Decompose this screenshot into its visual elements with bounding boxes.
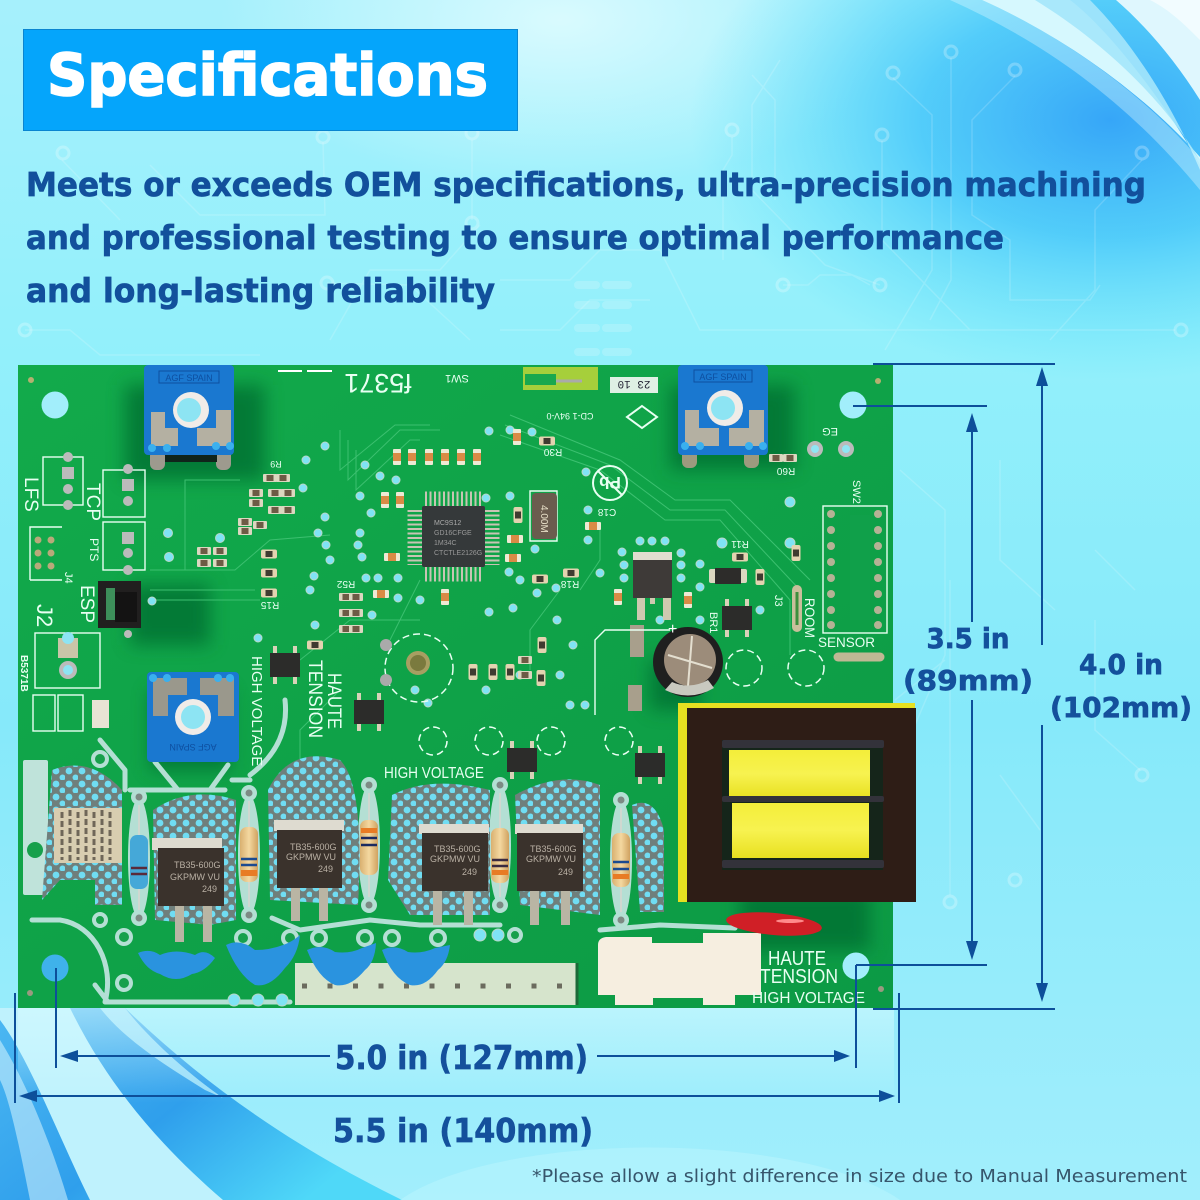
silkscreen labels: TENSION [304,660,325,738]
date label [610,377,658,393]
triac Q5: 249 [202,884,217,894]
silkscreen labels: B5371B [18,655,29,692]
microcontroller U1 [415,499,492,574]
small ICs [270,646,665,784]
silkscreen labels: R60 [776,465,795,476]
microcontroller U1: CTCTLE2126G [434,550,482,557]
SMD parts [197,429,800,686]
dimension: 5.5 in [15,993,899,1150]
blue trim potentiometer bottom: AGF SPAIN [169,742,217,752]
triac Q4: 249 [318,864,333,874]
silkscreen labels [18,368,875,1007]
white relay [598,933,761,1005]
triac Q6: TB35-600G [530,844,577,854]
silkscreen labels: J4 [62,572,74,584]
center post P3 [380,639,430,686]
dimension: 5.0 in: 5.0 in (127mm) [335,1038,588,1077]
silkscreen labels: R9 [270,459,282,469]
silkscreen labels: PTS [87,538,101,561]
green LED [523,367,598,390]
triac Q4: GKPMW VU [286,852,336,862]
pad rings [93,752,521,990]
silkscreen labels: BR1 [707,612,719,633]
dimension: 4.0 in: 4.0 in [1079,648,1163,681]
black connector ESP [98,581,141,638]
description text: and professional testing to ensure optimal performance [26,218,1004,257]
red capacitor [725,909,823,939]
blue trim potentiometer bottom [147,672,239,762]
jumpers J3 [797,590,880,657]
triac Q6: GKPMW VU [526,854,576,864]
blue ceramic capacitors [138,935,450,985]
triac Q3: GKPMW VU [430,854,480,864]
diode and bridge rectifier [709,568,752,637]
triac Q6 [515,824,583,925]
triac group [152,820,583,942]
dimension: 3.5 in: (89mm) [903,664,1033,697]
description text [26,165,1146,310]
copper pads with vias [42,756,664,925]
silkscreen labels: LFS [20,477,41,512]
date label: 23 10 [617,377,651,389]
triac Q5: TB35-600G [174,860,221,870]
silkscreen labels: TENSION [760,966,838,988]
silkscreen labels: ROOM [802,598,818,638]
dimension: 4.0 in: (102mm) [1050,691,1192,724]
silkscreen labels: SW2 [850,480,862,504]
mounting holes [27,377,884,996]
voltage regulator Q1 [633,552,672,620]
silkscreen labels: SENSOR [818,634,875,650]
lead-free mark: Pb [599,473,621,492]
crystal Y1 [530,491,557,541]
silkscreen labels: R30 [543,446,562,457]
title banner [24,30,518,130]
triac Q3: TB35-600G [434,844,481,854]
silkscreen labels: HIGH VOLTAGE [752,990,865,1007]
silkscreen labels: SW1 [445,372,469,384]
triac Q3 [419,824,489,925]
silkscreen labels: J3 [772,595,784,607]
silkscreen labels: ESP [76,585,97,623]
left terminals LFS TCP PTS J4 J2 [30,452,145,688]
silkscreen labels: EG [822,425,838,437]
blue trim potentiometer top-right [678,365,768,468]
UL mark: CD-1 94V-0 [546,411,594,421]
electrolytic capacitor [595,621,723,715]
microcontroller U1: 1M34C [434,540,457,547]
silkscreen labels: HIGH VOLTAGE [248,656,265,766]
dimension: 3.5 in: 3.5 in [926,622,1010,655]
adjust ring and diode outlines [385,634,824,755]
transformer [678,703,916,902]
silkscreen labels: R11 [731,538,749,549]
microcontroller U1: GD16CFGE [434,530,472,537]
lead-free mark [593,466,627,500]
wide mint traces [23,700,735,1002]
dimension: 3.5 in [853,406,1033,965]
silkscreen labels: HIGH VOLTAGE [384,765,484,782]
silkscreen labels: HAUTE [768,948,826,970]
silkscreen labels: f5371 [344,368,412,398]
silkscreen labels: R18 [560,578,579,589]
circuit board [18,365,916,1008]
UL mark [546,406,657,428]
pot shadows [125,385,870,950]
blue trim potentiometer top-left [144,365,234,470]
triac Q4 [274,820,344,921]
switch SW2 [823,506,887,633]
test points EG [807,441,854,457]
silkscreen labels: TCP [82,483,103,521]
blue trim potentiometer top-right: AGF SPAIN [699,372,747,382]
microcontroller U1: MC9S12 [434,520,461,527]
axial resistors [130,777,630,928]
dimension: 5.0 in [56,965,856,1077]
background circuit traces [19,46,1187,908]
signal traces [150,415,810,770]
triac Q3: 249 [462,867,477,877]
crystal Y1: 4.00M [538,505,549,533]
silkscreen labels: R52 [336,578,355,589]
silkscreen labels: HAUTE [323,673,344,729]
terminal strip connector [295,963,577,1005]
dimension: 4.0 in [873,364,1192,1009]
triac Q4: TB35-600G [290,842,337,852]
silkscreen labels: R15 [260,599,279,610]
blue trim potentiometer top-left: AGF SPAIN [165,373,213,383]
description text: and long-lasting reliability [26,271,495,310]
thermal pad [54,808,122,863]
footnote: *Please allow a slight difference in size due to Manual Measurement [532,1166,1187,1187]
silkscreen labels: J2 [32,604,57,627]
triac Q5 [152,838,224,942]
silkscreen labels: C18 [597,506,616,517]
title banner: Specifications [47,41,488,109]
triac Q6: 249 [558,867,573,877]
vias [148,426,795,1006]
dimension: 5.5 in: 5.5 in (140mm) [333,1111,593,1150]
optocoupler pads U7 U8 U9 [33,695,109,731]
bottom-left swoosh [0,1008,402,1200]
electrolytic capacitor: + [668,621,677,638]
triac Q5: GKPMW VU [170,872,220,882]
description text: Meets or exceeds OEM specifications, ultra-precision machining [26,165,1146,204]
